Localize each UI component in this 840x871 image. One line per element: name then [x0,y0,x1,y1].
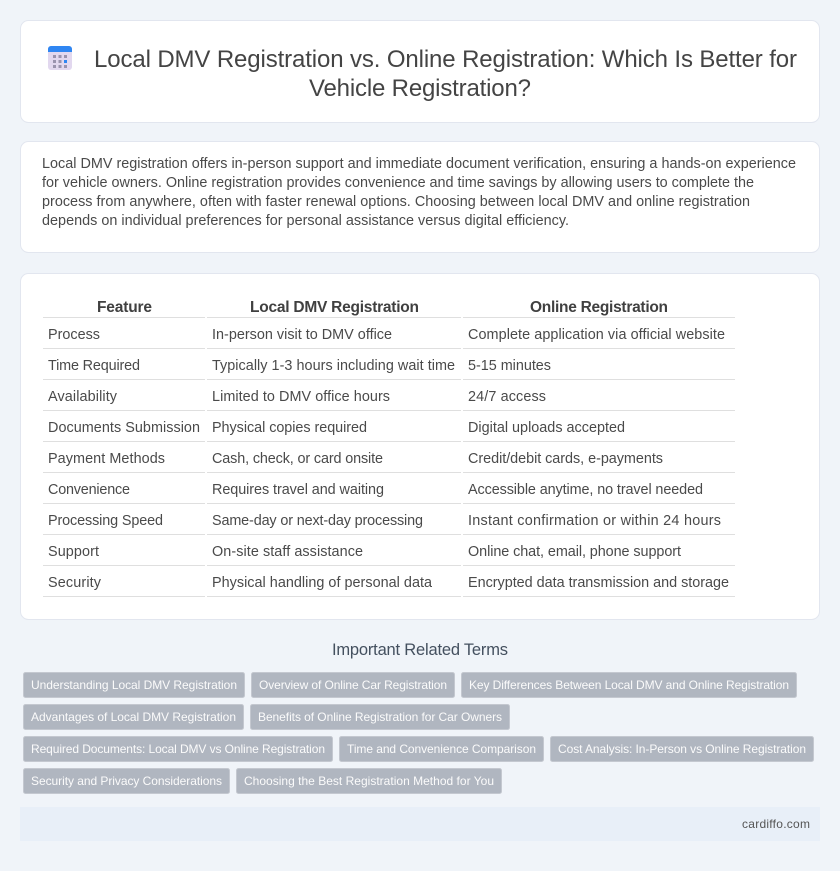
row: Security: Physical handling of personal data [212,575,432,591]
tag: Time and Convenience Comparison [347,742,536,756]
row: Convenience: Accessible anytime, no travel needed [468,482,703,498]
related term tags [24,672,814,794]
table header: Feature [97,299,152,316]
tag [252,672,454,698]
tag: Required Documents: Local DMV vs Online Registration [31,742,325,756]
row: Documents Submission [48,420,625,436]
summary text: Local DMV registration offers in-person support and immediate document verification, ensuring a hands-on experience [42,156,796,172]
row: Processing Speed [48,513,721,529]
row: Processing Speed: Processing Speed [48,513,163,529]
row: Support: Online chat, email, phone support [468,544,681,560]
footer: cardiffo.com [742,817,810,831]
row: Process: Process [48,327,100,343]
row: Availability: 24/7 access [468,389,546,405]
row: Documents Submission: Digital uploads accepted [468,420,625,436]
heading: Local DMV Registration vs. Online Registration: Which Is Better for [94,46,797,73]
tag [250,704,510,730]
row: Security [48,575,729,591]
row: Availability: Limited to DMV office hours [212,389,390,405]
row: Time Required [48,358,551,374]
summary text: process from anywhere, often with faster renewal options. Choosing between local DMV and online registration [42,194,750,210]
tag: Understanding Local DMV Registration [31,678,237,692]
row: Support: On-site staff assistance [212,544,363,560]
tag: Benefits of Online Registration for Car Owners [258,710,502,724]
panel: summary [20,142,820,252]
row: Payment Methods: Credit/debit cards, e-payments [468,451,663,467]
row: Convenience [48,482,703,498]
row: Convenience: Convenience [48,482,130,498]
tag [462,672,796,698]
panel: comparison table [20,274,820,620]
footer [20,807,820,841]
table header [97,299,668,316]
heading: Vehicle Registration? [309,75,531,102]
row: Documents Submission: Physical copies required [212,420,367,436]
row: Payment Methods: Payment Methods [48,451,165,467]
tag [550,736,814,762]
summary text: depends on individual preferences for personal assistance versus digital efficiency. [42,213,569,229]
row: Availability [48,389,546,405]
panel: title [20,20,820,122]
table header: Online Registration [530,299,668,316]
tag: Overview of Online Car Registration [259,678,447,692]
tag [24,736,332,762]
row: Process [48,327,725,343]
row: Time Required: 5-15 minutes [468,358,551,374]
tag [236,768,502,794]
summary text [42,156,796,229]
row: Security: Encrypted data transmission and storage [468,575,729,591]
row: Payment Methods: Cash, check, or card onsite [212,451,383,467]
row: Processing Speed: Instant confirmation or within 24 hours [468,513,721,529]
tag [340,736,544,762]
row: Process: In-person visit to DMV office [212,327,392,343]
row: Time Required: Time Required [48,358,140,374]
row: Processing Speed: Same-day or next-day processing [212,513,423,529]
row: Documents Submission: Documents Submission [48,420,200,436]
tag [24,768,230,794]
tag: Cost Analysis: In-Person vs Online Registration [558,742,806,756]
row: Time Required: Typically 1-3 hours including wait time [212,358,455,374]
row: Process: Complete application via official website [468,327,725,343]
tag [24,672,244,698]
icon: calendar [48,46,72,70]
row: Payment Methods [48,451,663,467]
tag: Advantages of Local DMV Registration [31,710,236,724]
heading [94,46,797,102]
tag [24,704,244,730]
row: Support: Support [48,544,99,560]
row: Availability: Availability [48,389,118,405]
tag: Choosing the Best Registration Method for You [244,774,494,788]
summary text: for vehicle owners. Online registration provides convenience and time savings by allowing users to complete the [42,175,754,191]
tag: Key Differences Between Local DMV and Online Registration [469,678,789,692]
row: Convenience: Requires travel and waiting [212,482,384,498]
tag: Security and Privacy Considerations [31,774,222,788]
heading: related terms: Important Related Terms [332,641,508,659]
row: Support [48,544,681,560]
row: Security: Security [48,575,102,591]
table header: Local DMV Registration [250,299,419,316]
